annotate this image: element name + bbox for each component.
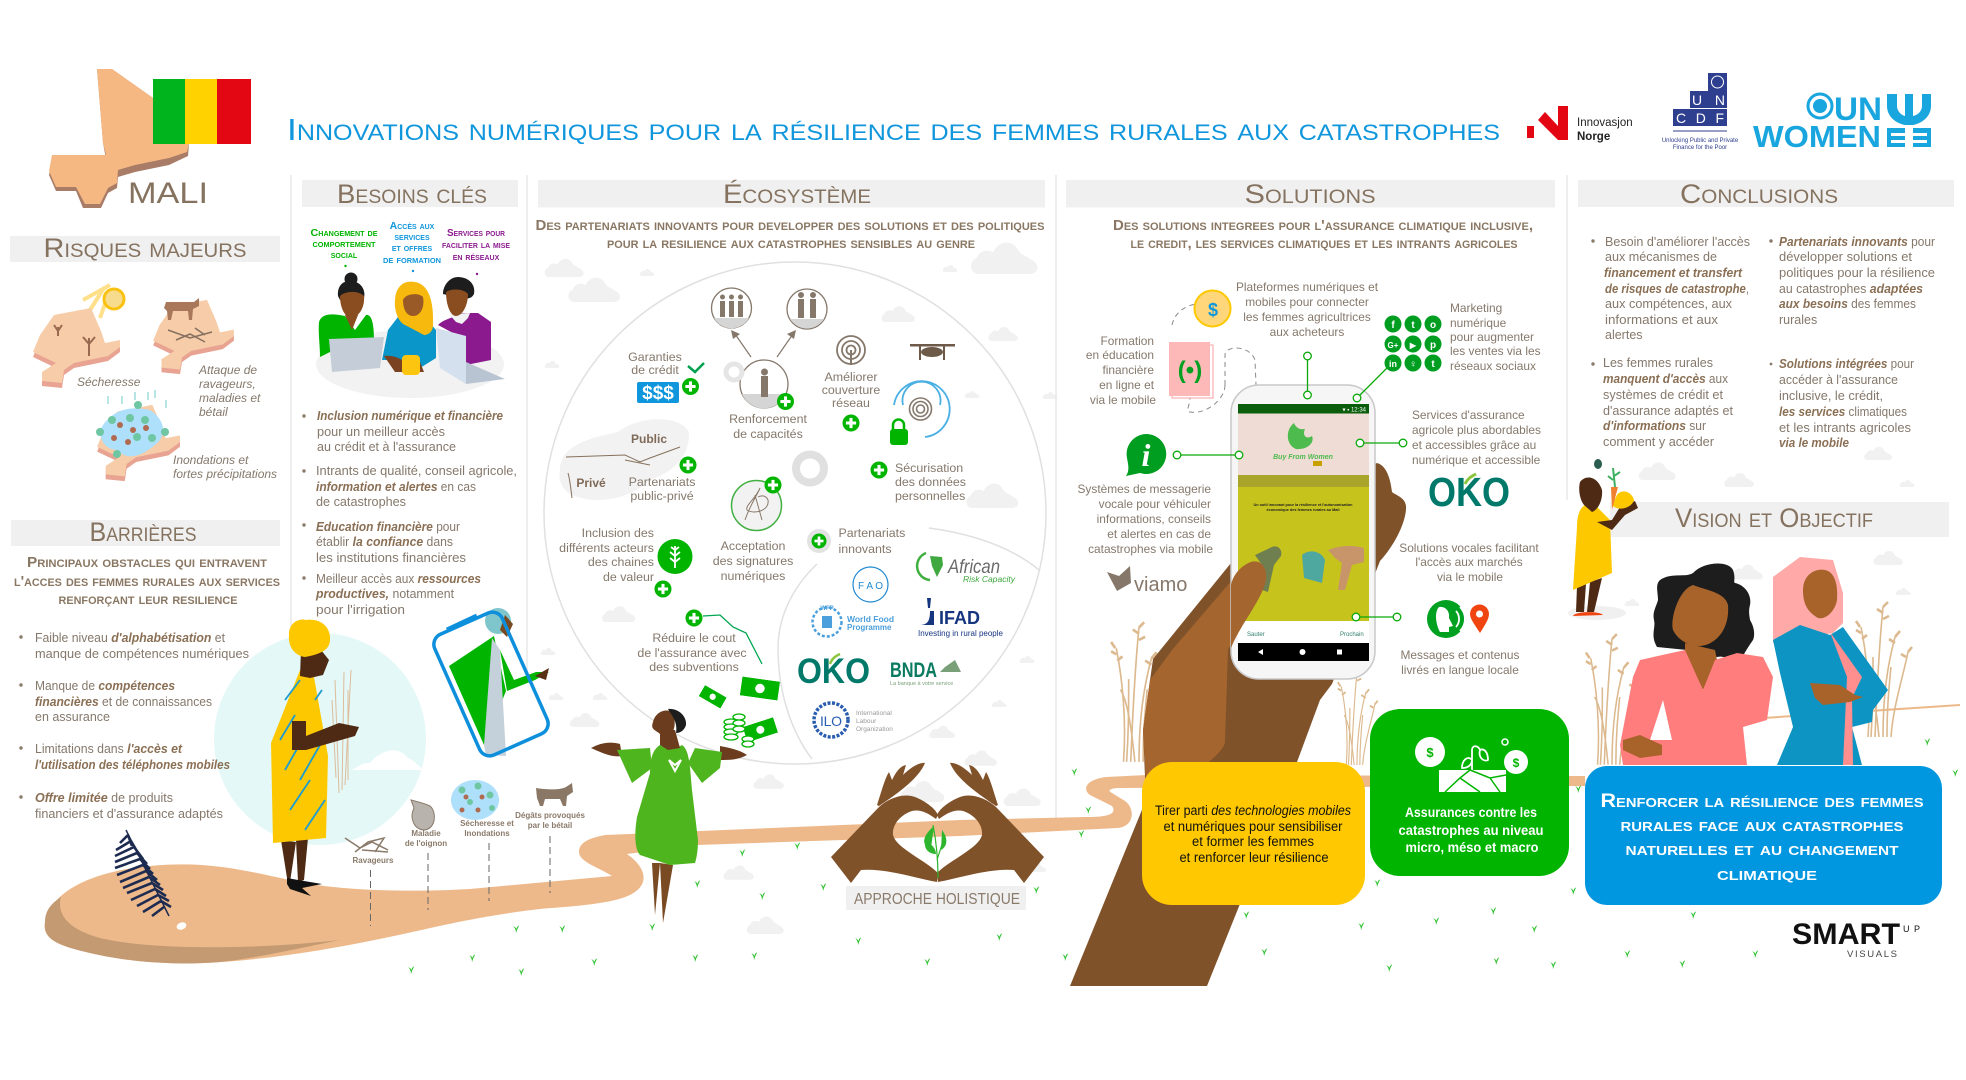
callout: yellow box bbox=[1142, 762, 1365, 905]
text: besoins bullets: de catastrophes bbox=[316, 494, 406, 509]
item: marketing numérique: t bbox=[1431, 359, 1435, 370]
logo: ILO bbox=[814, 703, 893, 737]
illustration: heart hands bbox=[831, 763, 1044, 883]
item: formation financière: en ligne et bbox=[1099, 378, 1155, 392]
heading: solutions: Solutions bbox=[1244, 179, 1376, 209]
heading: conclusions: Conclusions bbox=[1680, 179, 1838, 209]
text: besoins bullets: productives, notamment bbox=[315, 586, 454, 601]
text: conclusions left column: d'informations sur bbox=[1603, 419, 1706, 433]
logo: World Food Programme: Programme bbox=[847, 623, 892, 632]
logo: ILO: International bbox=[856, 710, 892, 717]
item: solutions vocales bbox=[1399, 541, 1539, 584]
text: barrières bullets: l'utilisation des téléphones mobiles bbox=[35, 757, 230, 772]
item: formation financière: financière bbox=[1102, 363, 1154, 377]
hazard: sécheresse et inondations: Sécheresse et bbox=[460, 819, 514, 828]
logo: OKO (partners): OKO bbox=[797, 652, 870, 691]
logo: Innovasjon Norge: Norge bbox=[1577, 131, 1610, 143]
label: attaque bbox=[198, 363, 261, 419]
text: besoins bullets: établir la confiance dans bbox=[316, 534, 453, 549]
label: sécheresse: Sécheresse bbox=[77, 375, 141, 389]
item: marketing numérique: in bbox=[1389, 359, 1397, 369]
item: améliorer couverture réseau: Améliorer bbox=[824, 370, 878, 384]
logo: World Food Programme: WFP bbox=[820, 606, 834, 612]
thumb on screen bbox=[1231, 561, 1266, 648]
text: conclusions left column: aux compétences, aux bbox=[1605, 297, 1733, 311]
text: besoins bullets bbox=[302, 408, 517, 617]
logo: ILO: Labour bbox=[856, 718, 877, 725]
callout: yellow box: et renforcer leur résilience bbox=[1180, 850, 1328, 865]
text: conclusions right column: inclusive, le crédit, bbox=[1779, 389, 1883, 403]
logo: Innovasjon Norge bbox=[1527, 106, 1633, 143]
callout: green box: catastrophes au niveau bbox=[1398, 822, 1544, 838]
text: barrières bullets: en assurance bbox=[35, 709, 110, 724]
item: sécurisation des données bbox=[870, 381, 966, 503]
subtitle: écosystème: pour la resilience aux catastrophes sensibles au genre bbox=[607, 235, 975, 252]
subtitle: barrières: Principaux obstacles qui entravent bbox=[27, 554, 267, 571]
logo: UNCDF: C D F bbox=[1676, 110, 1724, 126]
item: marketing numérique: réseaux sociaux bbox=[1450, 359, 1536, 373]
item: renforcement de capacités bbox=[712, 288, 827, 441]
panel: solutions bbox=[1066, 179, 1555, 677]
text: besoins bullets: Intrants de qualité, conseil agricole, bbox=[316, 463, 517, 478]
labels above people: faciliter la mise bbox=[442, 239, 510, 251]
text: conclusions right column: développer solutions et bbox=[1779, 250, 1913, 264]
text: besoins bullets: information et alertes en cas bbox=[316, 479, 476, 494]
item: systèmes de messagerie: catastrophes via mobile bbox=[1088, 542, 1213, 556]
text: conclusions left column: financement et transfert bbox=[1604, 266, 1743, 280]
item: marketing numérique: numérique bbox=[1450, 316, 1507, 330]
logo: IFAD: Investing in rural people bbox=[918, 629, 1004, 638]
callout: blue vision box: naturelles et au changement bbox=[1626, 839, 1899, 860]
text: conclusions right column: via le mobile bbox=[1779, 436, 1849, 450]
item: marketing numérique: ▶ bbox=[1409, 341, 1417, 350]
item: marketing numérique: p bbox=[1430, 340, 1436, 351]
item: marketing numérique: ♀ bbox=[1409, 359, 1417, 370]
heading: vision et objectif: Vision et Objectif bbox=[1675, 503, 1873, 533]
text: besoins bullets: les institutions financières bbox=[316, 550, 466, 565]
illustration: woman in green shrugging bbox=[591, 709, 747, 923]
hand holding phone bbox=[1070, 463, 1406, 986]
icon: drought map bbox=[33, 285, 124, 388]
item: systèmes de messagerie: vocale pour véhiculer bbox=[1099, 497, 1211, 511]
item: marketing numérique bbox=[1384, 301, 1541, 373]
labels above people: et offres bbox=[392, 242, 432, 254]
pale circle backdrop behind farmer bbox=[214, 633, 426, 845]
logo: UNCDF bbox=[1662, 73, 1739, 151]
phone footer bbox=[1238, 621, 1369, 661]
subtitle: barrières: l'acces des femmes rurales aux services bbox=[14, 573, 280, 590]
logo: Smart Up Visuals bbox=[1792, 918, 1920, 960]
logo: UN Women: WOMEN bbox=[1753, 119, 1881, 154]
item: formation financière: en éducation bbox=[1086, 348, 1154, 362]
logo: African Risk Capacity: African bbox=[947, 557, 1000, 578]
illustration: three people with laptops bbox=[316, 272, 505, 398]
subtitle: solutions: Des solutions integrees pour l'assurance climatique inclusive, bbox=[1113, 217, 1533, 234]
hazard: dégâts du bétail: par le bétail bbox=[528, 821, 572, 830]
item: inclusion acteurs: de valeur bbox=[603, 570, 654, 584]
text: barrières bullets: Offre limitée de produits bbox=[35, 790, 173, 805]
background clouds bbox=[541, 243, 1914, 934]
item: messages langue locale bbox=[1401, 600, 1520, 677]
item: solutions vocales: via le mobile bbox=[1437, 570, 1503, 584]
item: sécurisation des données: des données bbox=[895, 475, 966, 489]
item: partenariats innovants: innovants bbox=[838, 542, 892, 556]
item: renforcement de capacités: de capacités bbox=[733, 427, 803, 441]
logo: Innovasjon Norge: Innovasjon bbox=[1577, 117, 1633, 129]
text: conclusions right column: au catastrophes adaptées bbox=[1779, 282, 1923, 296]
subtitle: solutions: le credit, les services climatiques et les intrants agricoles bbox=[1130, 235, 1518, 252]
text: conclusions left column: alertes bbox=[1605, 328, 1643, 342]
heading: risques majeurs: Risques majeurs bbox=[44, 233, 246, 263]
text: conclusions right column: Partenariats innovants pour bbox=[1779, 235, 1935, 249]
text: conclusions left column bbox=[1591, 235, 1750, 449]
item: services d'assurance: et accessibles grâce au bbox=[1412, 438, 1536, 452]
text: besoins bullets: au crédit et à l'assurance bbox=[317, 439, 456, 454]
item: signatures numériques bbox=[713, 476, 793, 583]
item: partenariats innovants: Partenariats bbox=[838, 526, 905, 540]
text: barrières bullets: financiers et d'assurance adaptés bbox=[35, 806, 223, 821]
item: réduire le coût: des subventions bbox=[649, 660, 739, 674]
item: formation financière: (•) bbox=[1178, 357, 1202, 384]
logo: Smart Up Visuals: SMART bbox=[1792, 918, 1900, 951]
text: conclusions left column: Besoin d'améliorer l'accès bbox=[1605, 235, 1750, 249]
item: systèmes de messagerie: Systèmes de messagerie bbox=[1078, 482, 1211, 496]
icon: drone bbox=[910, 344, 955, 360]
item: partenariats public-privé: public-privé bbox=[630, 489, 694, 503]
logo: OKO: OKO bbox=[1428, 469, 1510, 515]
logo: viamo bbox=[1107, 566, 1187, 596]
phone screen image: Un outil innovant pour la résilience et l'autonomisation bbox=[1254, 503, 1353, 507]
subtitle: barrières bbox=[14, 554, 280, 608]
text: besoins bullets: Inclusion numérique et financière bbox=[317, 408, 503, 423]
logo: IFAD bbox=[918, 598, 1004, 638]
item: garanties de crédit: de crédit bbox=[631, 363, 679, 377]
label: inondations: Inondations et bbox=[173, 453, 249, 467]
item: plateformes numériques: aux acheteurs bbox=[1270, 325, 1344, 339]
panel: risques majeurs bbox=[10, 233, 280, 481]
item: garanties de crédit bbox=[628, 350, 704, 404]
icon: coins and plant: $ bbox=[1513, 756, 1520, 770]
labels above people: Accès aux bbox=[390, 220, 435, 232]
heading: écosystème: Écosystème bbox=[723, 179, 871, 209]
sprouts scattered on ground bbox=[408, 738, 1958, 976]
item: marketing numérique: Marketing bbox=[1450, 301, 1502, 315]
label: inondations bbox=[173, 453, 277, 481]
main title: Innovations numériques pour la résilience des femmes rurales aux catastrophes bbox=[287, 112, 1500, 147]
text: conclusions left column: d'assurance adaptés et bbox=[1603, 404, 1734, 418]
item: inclusion acteurs: différents acteurs bbox=[559, 541, 654, 555]
phone screen image bbox=[1238, 414, 1369, 621]
subtitle: écosystème: Des partenariats innovants pour developper des solutions et des politiques bbox=[536, 217, 1044, 234]
logo: UNCDF: U N bbox=[1692, 92, 1725, 108]
text: conclusions left column: de risques de catastrophe, bbox=[1605, 282, 1749, 296]
text: besoins bullets: Education financière pour bbox=[316, 519, 461, 534]
text: besoins bullets: pour l'irrigation bbox=[316, 602, 405, 617]
item: sécurisation des données: personnelles bbox=[895, 489, 965, 503]
illustration: woman in phone bbox=[430, 608, 552, 759]
logo: African Risk Capacity bbox=[917, 553, 1016, 584]
callout: yellow box: et numériques pour sensibiliser bbox=[1164, 819, 1343, 834]
logo: IFAD: IFAD bbox=[939, 608, 980, 628]
callout: blue vision box: rurales face aux catastrophes bbox=[1620, 815, 1904, 836]
icon: pests and livestock map bbox=[153, 298, 234, 374]
text: conclusions left column: aux mécanismes de bbox=[1605, 250, 1717, 264]
text: besoins bullets: Meilleur accès aux ressources bbox=[316, 571, 481, 586]
flag of Mali bbox=[153, 79, 251, 144]
item: marketing numérique: t bbox=[1411, 320, 1415, 331]
text: besoins bullets: pour un meilleur accès bbox=[317, 424, 445, 439]
label: attaque: Attaque de bbox=[198, 363, 257, 377]
item: services d'assurance: Services d'assurance bbox=[1412, 408, 1525, 422]
item: services d'assurance: agricole plus abordables bbox=[1412, 423, 1541, 437]
hazard: dégâts du bétail bbox=[515, 783, 585, 893]
logo: FAO bbox=[853, 567, 888, 602]
hazard: maladie de l'oignon: de l'oignon bbox=[405, 839, 447, 848]
logo: UN Women bbox=[1753, 91, 1931, 154]
logo: ILO: Organization bbox=[856, 726, 893, 733]
item: inclusion acteurs bbox=[559, 526, 692, 598]
item: solutions vocales: l'accès aux marchés bbox=[1415, 555, 1523, 569]
item: garanties de crédit: $$$ bbox=[642, 383, 674, 404]
logo: Smart Up Visuals: VISUALS bbox=[1847, 949, 1897, 960]
item: messages langue locale: livrés en langue locale bbox=[1401, 663, 1519, 677]
item: réduire le coût: de l'assurance avec bbox=[637, 646, 747, 660]
labels above people: de formation bbox=[383, 254, 441, 266]
logo: UNCDF: Unlocking Public and Private bbox=[1662, 138, 1739, 144]
logo: BNDA: La banque à votre service bbox=[890, 681, 953, 687]
phone status bar: ▾ ▪ 12:34 bbox=[1342, 408, 1367, 414]
item: plateformes numériques: Plateformes numériques et bbox=[1236, 280, 1379, 294]
item: plateformes numériques: les femmes agricultrices bbox=[1243, 310, 1371, 324]
item: améliorer couverture réseau: réseau bbox=[832, 396, 870, 410]
panel: barrières bbox=[11, 517, 280, 821]
labels above people: Services pour bbox=[447, 227, 505, 239]
winding road bbox=[45, 705, 1960, 963]
hazard: ravageurs: Ravageurs bbox=[353, 856, 394, 865]
heading: besoins clés: Besoins clés bbox=[337, 179, 487, 209]
item: services d'assurance: numérique et accessible bbox=[1412, 453, 1541, 467]
text: conclusions right column: Solutions intégrées pour bbox=[1779, 357, 1914, 371]
text: conclusions right column: rurales bbox=[1779, 313, 1817, 327]
item: messages langue locale: Messages et contenus bbox=[1401, 648, 1520, 662]
callout: yellow box: Tirer parti des technologies mobiles bbox=[1155, 803, 1351, 818]
phone status bar bbox=[1238, 404, 1369, 414]
item: marketing numérique: pour augmenter bbox=[1450, 330, 1534, 344]
logo: World Food Programme: World Food bbox=[847, 614, 894, 624]
item: services d'assurance bbox=[1412, 408, 1541, 515]
text: conclusions right column: politiques pour la résilience bbox=[1779, 266, 1935, 280]
item: formation financière bbox=[1086, 290, 1256, 412]
item: marketing numérique: f bbox=[1391, 320, 1395, 331]
icon: flood map bbox=[96, 390, 180, 481]
item: systèmes de messagerie: i bbox=[1142, 437, 1151, 473]
text: barrières bullets: financières et de connaissances bbox=[35, 694, 212, 709]
logo: ILO: ILO bbox=[820, 713, 842, 729]
text: conclusions right column: aux besoins des femmes bbox=[1779, 297, 1916, 311]
item: formation financière: via le mobile bbox=[1090, 393, 1156, 407]
logo: World Food Programme bbox=[812, 606, 894, 636]
item: inclusion acteurs: Inclusion des bbox=[582, 526, 654, 540]
label: attaque: ravageurs, bbox=[199, 377, 256, 391]
labels above people: social bbox=[331, 249, 358, 261]
text: conclusions left column: Les femmes rurales bbox=[1603, 356, 1713, 370]
phone screen image: Buy From Women bbox=[1273, 454, 1333, 461]
panel: vision et objectif bbox=[1610, 502, 1949, 537]
callout: blue vision box: climatique bbox=[1717, 864, 1817, 885]
text: barrières bullets bbox=[19, 630, 249, 821]
logo: FAO: F A O bbox=[858, 581, 883, 592]
illustration: farmer with wheat bbox=[271, 620, 424, 896]
item: solutions vocales: Solutions vocales facilitant bbox=[1399, 541, 1539, 555]
item: partenariats innovants bbox=[810, 526, 905, 556]
column dividers bbox=[291, 175, 1567, 820]
item: plateformes numériques: mobiles pour connecter bbox=[1245, 295, 1369, 309]
wheat plants bbox=[1111, 602, 1912, 765]
item: formation financière: Formation bbox=[1100, 334, 1154, 348]
phone footer: Sauter bbox=[1247, 632, 1265, 638]
item: plateformes numériques bbox=[1236, 280, 1379, 339]
item: améliorer couverture réseau bbox=[822, 336, 880, 432]
illustration: palm leaf bbox=[115, 830, 171, 916]
icon: coins and plant bbox=[1415, 737, 1528, 792]
logo: Smart Up Visuals: UP bbox=[1903, 924, 1920, 934]
hazard: maladie de l'oignon bbox=[405, 800, 447, 910]
text: conclusions left column: comment y accéder bbox=[1603, 435, 1714, 449]
item: sécurisation des données: Sécurisation bbox=[895, 461, 963, 475]
connector lines bbox=[1173, 352, 1407, 621]
item: signatures numériques: Acceptation bbox=[721, 539, 785, 553]
hazard: maladie de l'oignon: Maladie bbox=[411, 829, 441, 838]
item: renforcement de capacités: Renforcement bbox=[729, 412, 807, 426]
label: approche holistique bbox=[846, 886, 1026, 910]
panel: besoins clés bbox=[302, 179, 518, 617]
labels above people: Changement de bbox=[310, 227, 378, 239]
hazard: dégâts du bétail: Dégâts provoqués bbox=[515, 811, 585, 820]
icon: coins and plant: $ bbox=[1426, 745, 1434, 760]
logo: UNCDF: Finance for the Poor bbox=[1673, 145, 1727, 151]
item: améliorer couverture réseau: couverture bbox=[822, 383, 880, 397]
hazard: ravageurs bbox=[345, 838, 394, 926]
labels above people: comportement bbox=[312, 238, 376, 250]
text: conclusions left column: manquent d'accès aux bbox=[1603, 372, 1729, 386]
labels above people: services bbox=[394, 231, 430, 243]
item: garanties de crédit: Garanties bbox=[628, 350, 682, 364]
text: conclusions right column: et les intrants agricoles bbox=[1779, 421, 1911, 435]
ecosystem circle bbox=[544, 262, 1046, 764]
heading: barrières: Barrières bbox=[90, 517, 196, 547]
item: partenariats public-privé: Partenariats bbox=[629, 475, 695, 489]
panel: conclusions bbox=[1578, 179, 1954, 450]
logo: viamo: viamo bbox=[1134, 574, 1187, 596]
item: partenariats public-privé: Public bbox=[631, 432, 667, 446]
illustration: small farmer with carrot bbox=[1568, 459, 1638, 620]
item: réduire le coût bbox=[637, 610, 780, 747]
logo: African Risk Capacity: Risk Capacity bbox=[963, 574, 1016, 584]
logo: BNDA: BNDA bbox=[890, 659, 937, 682]
hazard icons with dashed markers bbox=[345, 780, 585, 926]
phone footer: Prochain bbox=[1340, 632, 1364, 638]
item: marketing numérique: o bbox=[1430, 320, 1436, 331]
icon: large gear bbox=[796, 454, 824, 482]
callout: green box bbox=[1370, 709, 1569, 876]
item: réduire le coût: Réduire le cout bbox=[652, 631, 736, 645]
plant bbox=[924, 825, 946, 878]
text: conclusions right column bbox=[1769, 235, 1935, 450]
label: inondations: fortes précipitations bbox=[173, 467, 277, 481]
callout: blue vision box: Renforcer la résilience des femmes bbox=[1600, 791, 1924, 812]
item: inclusion acteurs: des chaines bbox=[588, 555, 654, 569]
text: barrières bullets: Manque de compétences bbox=[35, 678, 175, 693]
item: signatures numériques: des signatures bbox=[713, 554, 793, 568]
text: barrières bullets: Limitations dans l'accès et bbox=[35, 741, 183, 756]
item: marketing numérique: G+ bbox=[1388, 341, 1399, 350]
callout: yellow box: et former les femmes bbox=[1192, 834, 1314, 849]
phone screen image: économique des femmes rurales au Mali bbox=[1266, 508, 1340, 512]
item: partenariats public-privé: Privé bbox=[576, 476, 606, 490]
text: conclusions right column: accéder à l'assurance bbox=[1779, 373, 1898, 387]
labels above people: en réseaux bbox=[453, 251, 500, 263]
panel: écosystème bbox=[536, 179, 1046, 764]
item: marketing numérique: les ventes via les bbox=[1450, 344, 1541, 358]
hazard: sécheresse et inondations bbox=[451, 780, 514, 901]
callout: green box: micro, méso et macro bbox=[1406, 839, 1538, 855]
item: signatures numériques: numériques bbox=[721, 569, 785, 583]
labels above people bbox=[310, 220, 510, 275]
partner logos bbox=[797, 553, 1016, 737]
illustration: woman in pink bbox=[1620, 564, 1773, 765]
subtitle: écosystème bbox=[536, 217, 1044, 252]
callout: green box: Assurances contre les bbox=[1405, 804, 1537, 820]
subtitle: barrières: renforçant leur resilience bbox=[58, 591, 238, 608]
item: partenariats public-privé bbox=[560, 419, 696, 503]
text: barrières bullets: manque de compétences numériques bbox=[35, 646, 249, 661]
item: systèmes de messagerie: et alertes en cas de bbox=[1107, 527, 1211, 541]
label: approche holistique: APPROCHE HOLISTIQUE bbox=[854, 891, 1020, 908]
Mali map and flag bbox=[49, 69, 251, 210]
mobile phone bbox=[1231, 385, 1375, 679]
logo: UN Women: UN bbox=[1834, 91, 1882, 127]
callout: blue vision box bbox=[1585, 766, 1942, 905]
country name: MALI bbox=[128, 177, 208, 210]
hazard: sécheresse et inondations: Inondations bbox=[464, 829, 510, 838]
text: conclusions left column: informations et aux bbox=[1605, 313, 1719, 327]
item: formation financière: $ bbox=[1208, 300, 1218, 320]
text: conclusions left column: systèmes de crédit et bbox=[1603, 388, 1724, 402]
label: attaque: bétail bbox=[199, 405, 228, 419]
text: barrières bullets: Faible niveau d'alphabétisation et bbox=[35, 630, 225, 645]
illustration: woman in hijab bbox=[1773, 557, 1888, 765]
text: conclusions right column: les services climatiques bbox=[1779, 405, 1907, 419]
item: systèmes de messagerie: informations, conseils bbox=[1097, 512, 1211, 526]
subtitle: solutions bbox=[1113, 217, 1533, 252]
label: attaque: maladies et bbox=[199, 391, 261, 405]
item: systèmes de messagerie bbox=[1078, 434, 1213, 596]
